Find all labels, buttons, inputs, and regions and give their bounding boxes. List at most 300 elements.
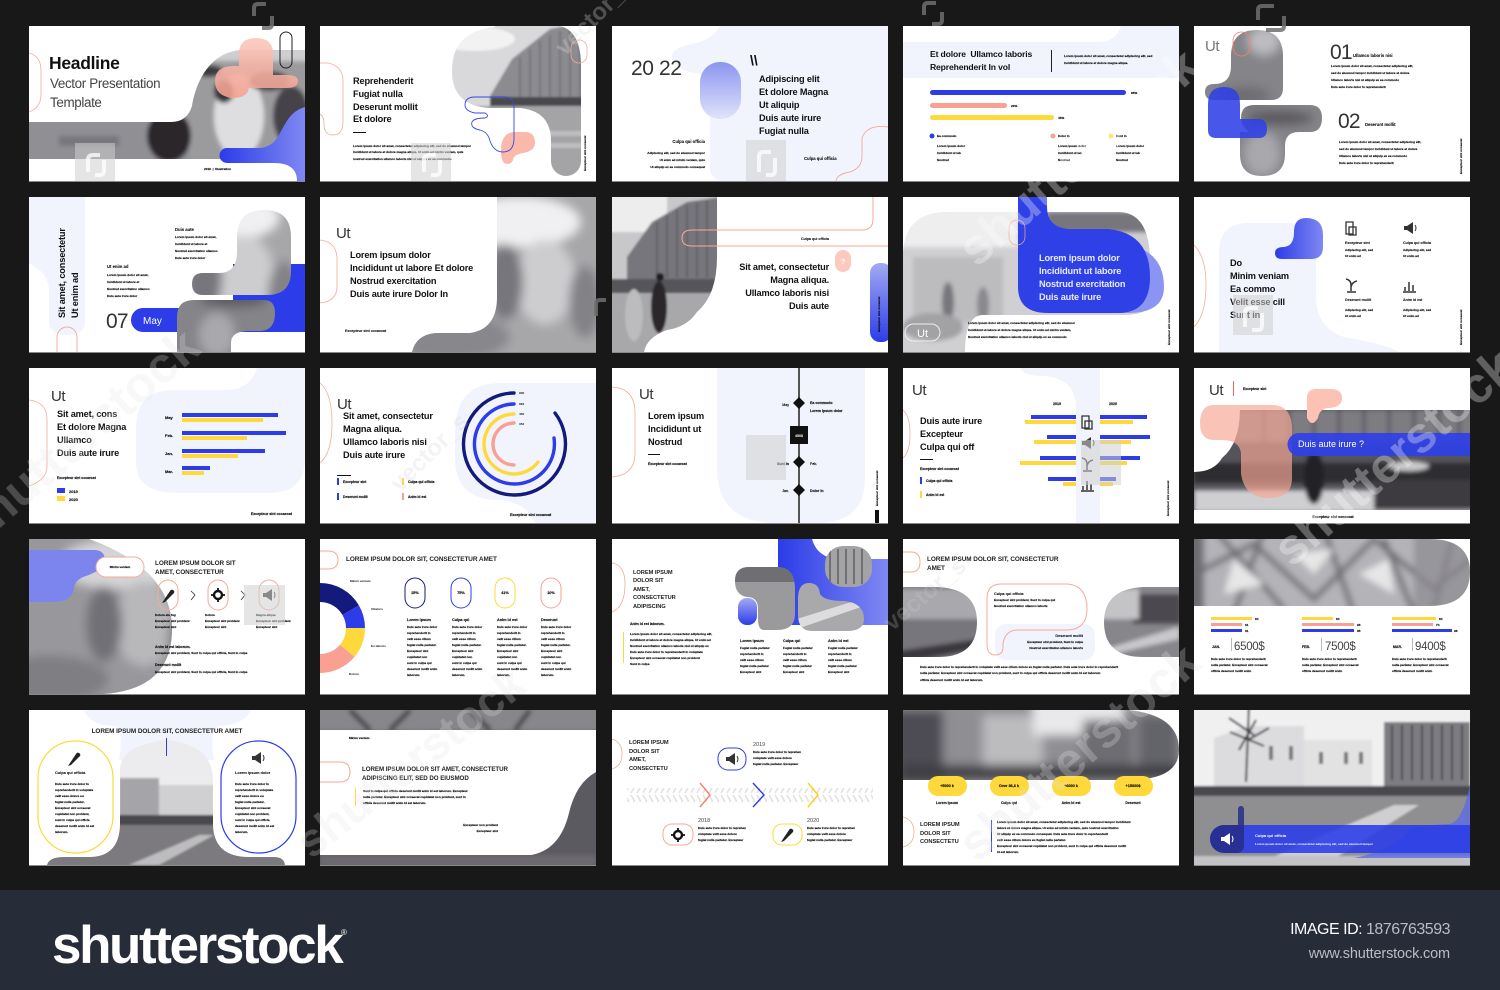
slide: three step process (29, 539, 305, 694)
heading list: Ullamco laboris nisi (343, 437, 427, 447)
metric: February: 95 (1357, 629, 1361, 633)
photo: building (825, 546, 872, 587)
column texts: Excepteur sint (541, 649, 562, 653)
heading: reprehenderit list: Reprehenderit (353, 76, 413, 86)
outline: pink pill (903, 552, 920, 572)
columns: velit esse cillum (740, 658, 764, 662)
heading list: Minim veniam (1230, 271, 1289, 281)
pill: culpa: cupidatat non proident, (55, 812, 90, 816)
metric: March: 84 (1439, 617, 1443, 621)
outline: pink arc (1194, 245, 1206, 327)
body text: Ut aliquip ex ea commodo consequat. Duis aute irure dolor in reprehenderit (997, 832, 1108, 836)
stat: 86.6k: Culpa qui (1001, 801, 1017, 805)
legend: Dolor in (1058, 134, 1070, 138)
heading: reprehenderit list: Et dolore (353, 114, 392, 124)
text block: second: sed do eiusmod tempor incididunt ut labore et dolore (1339, 147, 1418, 151)
legend: Ea commodo (937, 134, 957, 138)
rule: red (1233, 381, 1234, 396)
text block: first: Ullamco laboris nisi ut aliquip ex ea commodo (1331, 78, 1399, 82)
bar chart: Feb. (165, 433, 173, 438)
pill: 75%: 75% (457, 591, 465, 595)
heading list: Velit esse cill (1230, 297, 1285, 307)
metric: March: officia deserunt mollit anim (1392, 669, 1432, 673)
radial chart: 884 (519, 402, 524, 406)
pill: 25% (405, 578, 425, 608)
text: 2020: voluptate velit esse dolore (807, 832, 846, 836)
heading: AMET (927, 565, 945, 572)
label: Ut: Ut (1205, 38, 1220, 55)
legend: Culpa qui officia (408, 480, 434, 484)
pill: 25%: 25% (411, 591, 419, 595)
outline: pink arc (903, 410, 910, 458)
heading: LOREM IPSUM (920, 822, 960, 828)
background: light zone (717, 368, 865, 523)
icon: speaker (1404, 222, 1416, 234)
icon: chart (1081, 481, 1094, 491)
rule: blue (166, 738, 167, 756)
column texts: velit esse cillum (452, 637, 476, 641)
photo: square (903, 212, 1150, 352)
slide: timeline with chevrons (612, 710, 888, 865)
heading list: Lorem ipsum dolor (350, 250, 431, 260)
column texts: sunt in culpa qui (497, 661, 522, 665)
heading: CONSECTETU (629, 766, 668, 772)
heading: list: Fugiat nulla (759, 126, 810, 136)
legend: Dunt in (1116, 134, 1127, 138)
pill: 10% (541, 578, 561, 608)
heading: list: Adipiscing elit (759, 74, 820, 84)
metric: February: officia deserunt mollit anim (1302, 669, 1342, 673)
body text: Incididunt ut labore et dolore magna aliqua. Ut enim ad (630, 638, 711, 642)
legend: Nostrud (1058, 158, 1070, 162)
heading: Headline: Headline (49, 53, 120, 73)
legend: Anim id est (408, 495, 427, 499)
bar chart: 85% (1131, 91, 1137, 95)
rotated heading: Sit amet, consectetur (57, 228, 67, 318)
column texts: reprehenderit in (497, 631, 521, 635)
heading list: Magna aliqua. (343, 424, 402, 434)
body text: Duis aute irure dolor in reprehenderit in voluptate (630, 650, 703, 654)
timeline: Lorem ipsum dolor (810, 409, 843, 413)
text: culpa: Culpa qui officia (994, 592, 1024, 596)
donut chart: Ex laboris (371, 644, 386, 648)
body text: nulla pariatur. Excepteur sint occaecat cupidatat non proident, sunt in (363, 795, 466, 799)
step captions: Excepteur sint proident (256, 619, 291, 623)
legend: Deserunt mollit (343, 495, 369, 499)
background: light zone (1219, 223, 1399, 352)
column labels: Culpa qui (452, 618, 469, 622)
photo: lower form (1240, 105, 1322, 176)
pill: question: ? (841, 259, 845, 266)
outline: pink arc (29, 53, 41, 112)
columns: Lorem ipsum (740, 639, 764, 643)
watermark overlay: vector_s (879, 552, 972, 636)
pill: minim veniam: Minim veniam (110, 565, 130, 569)
columns: fugiat nulla pariatur (828, 664, 858, 668)
text: 2019: fugiat nulla pariatur. Excepteur (753, 762, 799, 766)
heading: white list: Nostrud exercitation (1039, 279, 1126, 289)
column texts: cupidatat non (452, 655, 472, 659)
pill: 75% (451, 578, 471, 608)
bar chart: May (165, 415, 174, 420)
pill: lorem: deserunt mollit anim id est (235, 824, 274, 828)
text block: culpa: Culpa qui officia (672, 139, 706, 144)
number: 01: 01 (1330, 41, 1352, 64)
text: deserunt: Nostrud exercitation ullamco laboris (1029, 646, 1083, 650)
slide: 20 22 (612, 26, 888, 181)
metric: March: 74 (1436, 623, 1440, 627)
column labels: Anim id est (497, 618, 518, 622)
pill: May (131, 308, 201, 332)
pill: speaker (718, 748, 746, 770)
background: light band (903, 26, 1179, 78)
step: gear (208, 580, 228, 610)
metric: January: 6500$ (1234, 641, 1265, 653)
slide: 01 02 numbered (1194, 26, 1470, 181)
column texts: Duis aute irure dolor (452, 625, 483, 629)
icon: speaker (1082, 437, 1094, 449)
title: ullamco: Ullamco laboris nisi (1353, 53, 1393, 58)
item texts: Adipiscing elit, sed (1345, 308, 1373, 312)
slide: icons grid (1194, 197, 1470, 352)
heading list: Ullamco (57, 435, 92, 445)
body text: Incididunt ut labore et dolore magna aliqua. Ut enim ad minim veniam, (968, 328, 1071, 332)
column texts: Duis aute irure dolor (497, 625, 528, 629)
text: 2020: fugiat nulla pariatur. Excepteur (807, 838, 853, 842)
column texts: Excepteur sint (452, 649, 473, 653)
site url: www.shutterstock.com (1308, 946, 1450, 962)
photo: cars and street (1194, 410, 1470, 510)
columns: Fugiat nulla pariatur (740, 646, 771, 650)
outline: pink arc (612, 563, 625, 612)
donut chart: Ullamco (371, 607, 383, 611)
metric: March: Duis aute irure dolor in reprehenderit (1392, 657, 1447, 661)
radial chart: 352 (519, 422, 524, 426)
body text: nostrud exercitation ullamco laboris nisi ut aliquip ex ea commodo (353, 157, 451, 161)
background: light form (1020, 368, 1100, 523)
heading: DOLOR SIT (629, 749, 660, 755)
column texts: sunt in culpa qui (407, 661, 432, 665)
photo: walkers (612, 197, 717, 352)
stat: 15000: Deserunt (1125, 801, 1141, 805)
outline: pink connector (682, 197, 888, 246)
label: minim: Minim veniam (349, 736, 370, 740)
legend: Incididunt ut lab (1116, 151, 1140, 155)
photo: left (903, 587, 977, 657)
background: light blue zone (672, 26, 888, 181)
photo: lower form (177, 300, 275, 352)
butterfly chart: 2020 (1109, 402, 1117, 406)
icon: speaker badge (1210, 806, 1244, 853)
metric: January: JAN. (1212, 645, 1220, 649)
legend: Lorem ipsum dolor (937, 144, 966, 148)
shape: blue background (778, 539, 888, 625)
photo: street (452, 26, 581, 176)
slide: collage photos (612, 539, 888, 694)
body text: officia deserunt mollit anim id est laborum. (920, 678, 983, 682)
arrow: chevron (191, 591, 195, 600)
column texts: velit esse cillum (497, 637, 521, 641)
arrow: yellow chevron (808, 783, 818, 807)
columns: Excepteur sint (740, 670, 761, 674)
column texts: fugiat nulla pariatur. (452, 643, 482, 647)
item texts: Excepteur sint (1345, 241, 1371, 245)
outline: pink left shape (320, 63, 343, 135)
columns: fugiat nulla pariatur (740, 664, 770, 668)
pill: blue vertical (870, 263, 892, 342)
pill: lorem: Excepteur sint occaecat (235, 806, 270, 810)
pill: Ut (905, 324, 940, 341)
rotated heading: Ut enim ad (70, 273, 80, 318)
legend (57, 488, 79, 502)
donut chart: Dolore (349, 672, 359, 676)
body text: Duis aute irure dolor in reprehenderit in voluptate velit esse cillum dolore eu fugiat nulla pariatur. Duis aute irure dolor in reprehenderit (920, 665, 1118, 669)
slide: mesh photo with three metrics (1194, 539, 1470, 694)
column texts: deserunt mollit anim (407, 667, 438, 671)
column texts: Excepteur sint (407, 649, 428, 653)
body text: Excepteur sint occaecat cupidatat non proident, sunt in culpa qui officia deserunt mollit (997, 844, 1126, 848)
text block: second: Lorem ipsum dolor sit amet, consectetur adipiscing elit, (1339, 140, 1421, 144)
subheading: Vector Presentation Template: Template (50, 95, 102, 110)
slide: donut with percent pills (320, 539, 596, 694)
pill: culpa: Excepteur sint occaecat (55, 806, 90, 810)
column texts: laborum. (497, 673, 510, 677)
heading: LOREM IPSUM DOLOR SIT, CONSECTETUR AMET (92, 728, 243, 735)
butterfly chart (1020, 402, 1150, 486)
year: 20 22: 20 22 (631, 57, 682, 80)
text block: ut enim: Lorem ipsum dolor sit amet, (107, 273, 149, 277)
label: Ut: Ut (1209, 382, 1224, 399)
text block: Excepteur sint proident, Sunt in culpa qui officia, Sunt in culpa (155, 670, 248, 674)
text: 2019: 2019 (753, 742, 765, 748)
icon: document (1346, 222, 1356, 235)
arrow: pink chevron (700, 783, 710, 807)
column texts: deserunt mollit anim (541, 667, 572, 671)
columns: Fugiat nulla pariatur (783, 646, 814, 650)
quote mark: \\ (750, 52, 758, 68)
columns: Anim id est (828, 639, 849, 643)
heading: white list: Incididunt ut labore (1039, 266, 1121, 276)
heading: AMET, (633, 587, 650, 593)
columns: velit esse cillum (783, 658, 807, 662)
text block: Anim id est laborum. (155, 645, 191, 649)
stat: 5000k (928, 776, 967, 805)
timeline (777, 368, 843, 523)
text block: culpa: Ut aliquip ex ea commodo consequat (650, 165, 705, 169)
icon: plant (1346, 279, 1357, 292)
metric: February: Duis aute irure dolor in reprehenderit (1302, 657, 1357, 661)
heading list: Sit amet, consectetur (739, 262, 830, 272)
heading: LOREM IPSUM DOLOR SIT (155, 560, 236, 567)
pill: lorem: velit esse dolore eu (235, 794, 264, 798)
column texts: fugiat nulla pariatur. (541, 643, 571, 647)
text block: duis: Nostrud exercitation ullamco (175, 249, 218, 253)
body text: Sunt in culpa (630, 662, 650, 666)
legend: Nostrud (1116, 158, 1128, 162)
column texts: Duis aute irure dolor (541, 625, 572, 629)
text right: Excepteur sint (477, 829, 498, 833)
body text: Excepteur sint occaecat cupidatat non proident (630, 656, 700, 660)
heading: DOLOR SIT (920, 831, 951, 837)
photo: upper form (192, 210, 291, 295)
body text: incididunt ut labore et dolore magna aliqua. Ut enim ad minim veniam, quis (353, 150, 464, 154)
item texts: Adipiscing elit, sed (1345, 248, 1373, 252)
heading: reprehenderit list: Deserunt mollit (353, 102, 418, 112)
text: 2020: 2020 (807, 818, 819, 824)
heading list: Incididunt ut labore Et dolore (350, 263, 473, 273)
legend: Lorem ipsum dolor (1116, 144, 1145, 148)
text: 2018: 2018 (698, 818, 710, 824)
heading: Reprehenderit In vol (930, 62, 1010, 72)
slide: sit amet 07 May (29, 197, 305, 352)
heading list: Incididunt ut (648, 424, 701, 434)
caption: bottom: Excepteur sint occaecat (1312, 515, 1354, 519)
heading list: Duis aute irure Dolor In (350, 289, 449, 299)
watermark overlay: shutterstock (947, 37, 1211, 277)
item texts: Anim id est (1403, 298, 1423, 302)
text block: culpa: Ut enim ad minim veniam, quis (660, 158, 705, 162)
quote bar (355, 788, 356, 806)
step captions: Excepteur sint (155, 625, 176, 629)
heading list: Duis aute irure (920, 416, 982, 426)
label: Ut: Ut (912, 382, 927, 399)
metric: January: nulla pariatur. Excepteur sint occaecat (1211, 663, 1268, 667)
vertical caption: Excepteur sint occaecat (1167, 310, 1171, 345)
columns: fugiat nulla pariatur (783, 664, 813, 668)
icon: chart (1403, 282, 1416, 292)
text block: culpa: Adipiscing elit, sed do eiusmod tempor (647, 151, 706, 155)
body text: id est laborum. (997, 850, 1019, 854)
heading list: Ullamco laboris nisi (745, 288, 829, 298)
body text: officia deserunt mollit anim id est laborum. (363, 801, 426, 805)
arrow: blue chevron (753, 783, 764, 807)
text right: Excepteur non proident (463, 823, 498, 827)
rule: blue (991, 820, 992, 852)
metric: January: 61 (1245, 623, 1249, 627)
legend: Excepteur sint (343, 480, 367, 484)
legend: 2020 (69, 497, 79, 502)
slide: street photo, culpa pill (612, 197, 888, 352)
outline: blue form (465, 97, 514, 152)
label: Ut: Ut (639, 386, 654, 403)
text block: second: Duis aute irure dolor in reprehenderit (1339, 161, 1394, 165)
text block: ut enim: Incididunt ut labore et (107, 280, 139, 284)
shape: blue form (1208, 87, 1267, 138)
photo: building dome (47, 740, 285, 865)
heading list: Duis aute irure (57, 448, 119, 458)
pill: culpa: laborum. (55, 830, 68, 834)
photo: road right (798, 583, 864, 631)
step captions: Dolore eiu fug (155, 613, 176, 617)
blue panel (233, 264, 305, 332)
metric: January: Duis aute irure dolor in reprehenderit (1211, 657, 1266, 661)
heading list: Duis aute (789, 301, 829, 311)
watermark overlay: shutterstock (947, 632, 1211, 872)
slide: horizontal bars (29, 368, 305, 523)
column texts: deserunt mollit anim (452, 667, 483, 671)
pill: culpa: sunt in culpa qui officia (55, 818, 90, 822)
text block: duis: Incididunt ut labore et (175, 242, 207, 246)
timeline: May (782, 403, 789, 407)
body text: Lorem ipsum dolor sit amet, consectetur adipiscing elit, sed do eiusmod (968, 321, 1075, 325)
item texts: Culpa qui officia (1403, 241, 1432, 245)
outline: pink curve (836, 126, 888, 181)
text block: duis: Lorem ipsum dolor sit amet, (175, 235, 217, 239)
stat: 5000k: Lorem ipsum (936, 801, 958, 805)
heading: Et dolore Ullamco laboris (930, 49, 1032, 59)
heading: ADIPISCING ELIT, SED DO EIUSMOD (362, 775, 469, 782)
donut chart: Minim veniam (350, 579, 371, 583)
columns: Culpa qui (783, 639, 800, 643)
metric: February: 84 (1336, 617, 1340, 621)
heading: DOLOR SIT (633, 578, 664, 584)
watermark overlay: shutterstock (285, 657, 535, 868)
banner: blue (1210, 825, 1470, 853)
legend: 2019 (69, 489, 79, 494)
outline: pink arc (320, 383, 332, 463)
step captions: Excepteur sint (205, 625, 226, 629)
pill: culpa: deserunt mollit anim id est (55, 824, 94, 828)
photo: dark blurred (315, 705, 601, 867)
text: 2018: voluptate velit esse dolore (698, 832, 737, 836)
slide: reprehenderit with street photo (320, 26, 596, 181)
heading list: Sit amet, consectetur (343, 411, 433, 421)
pill: lorem: Duis aute irure dolor in (235, 782, 269, 786)
timeline: Dolor in (810, 489, 824, 493)
heading: AMET, CONSECTETUR (155, 569, 224, 576)
divider dash (337, 475, 351, 476)
caption: year and label: 2019 | Illustration (204, 167, 231, 171)
stat: 6000k: +6000 k (1064, 784, 1079, 788)
heading list: Do (1230, 258, 1242, 268)
slide: radial chart (320, 368, 596, 523)
label: Anim id est laborum. (630, 622, 665, 626)
body text: nulla pariatur. Excepteur sint occaecat cupidatat non proident, sunt in culpa qui officia deserunt mollit anim id est laborum (920, 671, 1101, 675)
slide: bar chart ullamco (903, 26, 1179, 181)
step captions: Excepteur sint proident (155, 619, 190, 623)
pill: lorem: laborum. (235, 830, 248, 834)
text block: second: Ullamco laboris nisi ut aliquip ex ea commodo (1339, 154, 1407, 158)
body text: Nostrud exercitation ullamco laboris nisi ut aliquip ex (630, 644, 709, 648)
slide: title headline (29, 26, 305, 181)
title: deserunt: Deserunt mollit (1365, 122, 1396, 127)
metric: March: 98 (1454, 629, 1458, 633)
bar chart (165, 413, 286, 475)
slide: blue overlay on photo (903, 197, 1179, 352)
heading list: Sunt in (1230, 310, 1261, 320)
pill: culpa (38, 741, 113, 853)
stat: 15000: +15000$ (1126, 784, 1141, 788)
text block: ut enim: Duis aute irure dolor (107, 294, 138, 298)
footer bar (0, 890, 1500, 990)
heading: LOREM IPSUM (633, 570, 673, 576)
pill: 41%: 41% (501, 591, 509, 595)
intro text: Incididunt ut labore et dolore magna aliqua. (1064, 61, 1128, 65)
slide: lorem ipsum with blurred photo (320, 197, 596, 352)
pill: question (1288, 433, 1470, 456)
text: deserunt: Deserunt mollit (1055, 634, 1084, 638)
rotated heading (57, 228, 80, 318)
label: Ut: Ut (336, 225, 351, 242)
legend (337, 478, 434, 500)
heading: LOREM IPSUM DOLOR SIT, CONSECTETUR (927, 556, 1059, 563)
shape: pink overlay (215, 38, 298, 98)
step captions: Excepteur sint proident (205, 619, 240, 623)
metric: January: 84 (1255, 617, 1259, 621)
text block: Deserunt mollit (155, 663, 182, 667)
metric: January: 61 (1245, 629, 1249, 633)
heading: LOREM IPSUM DOLOR SIT AMET, CONSECTETUR (362, 766, 509, 773)
